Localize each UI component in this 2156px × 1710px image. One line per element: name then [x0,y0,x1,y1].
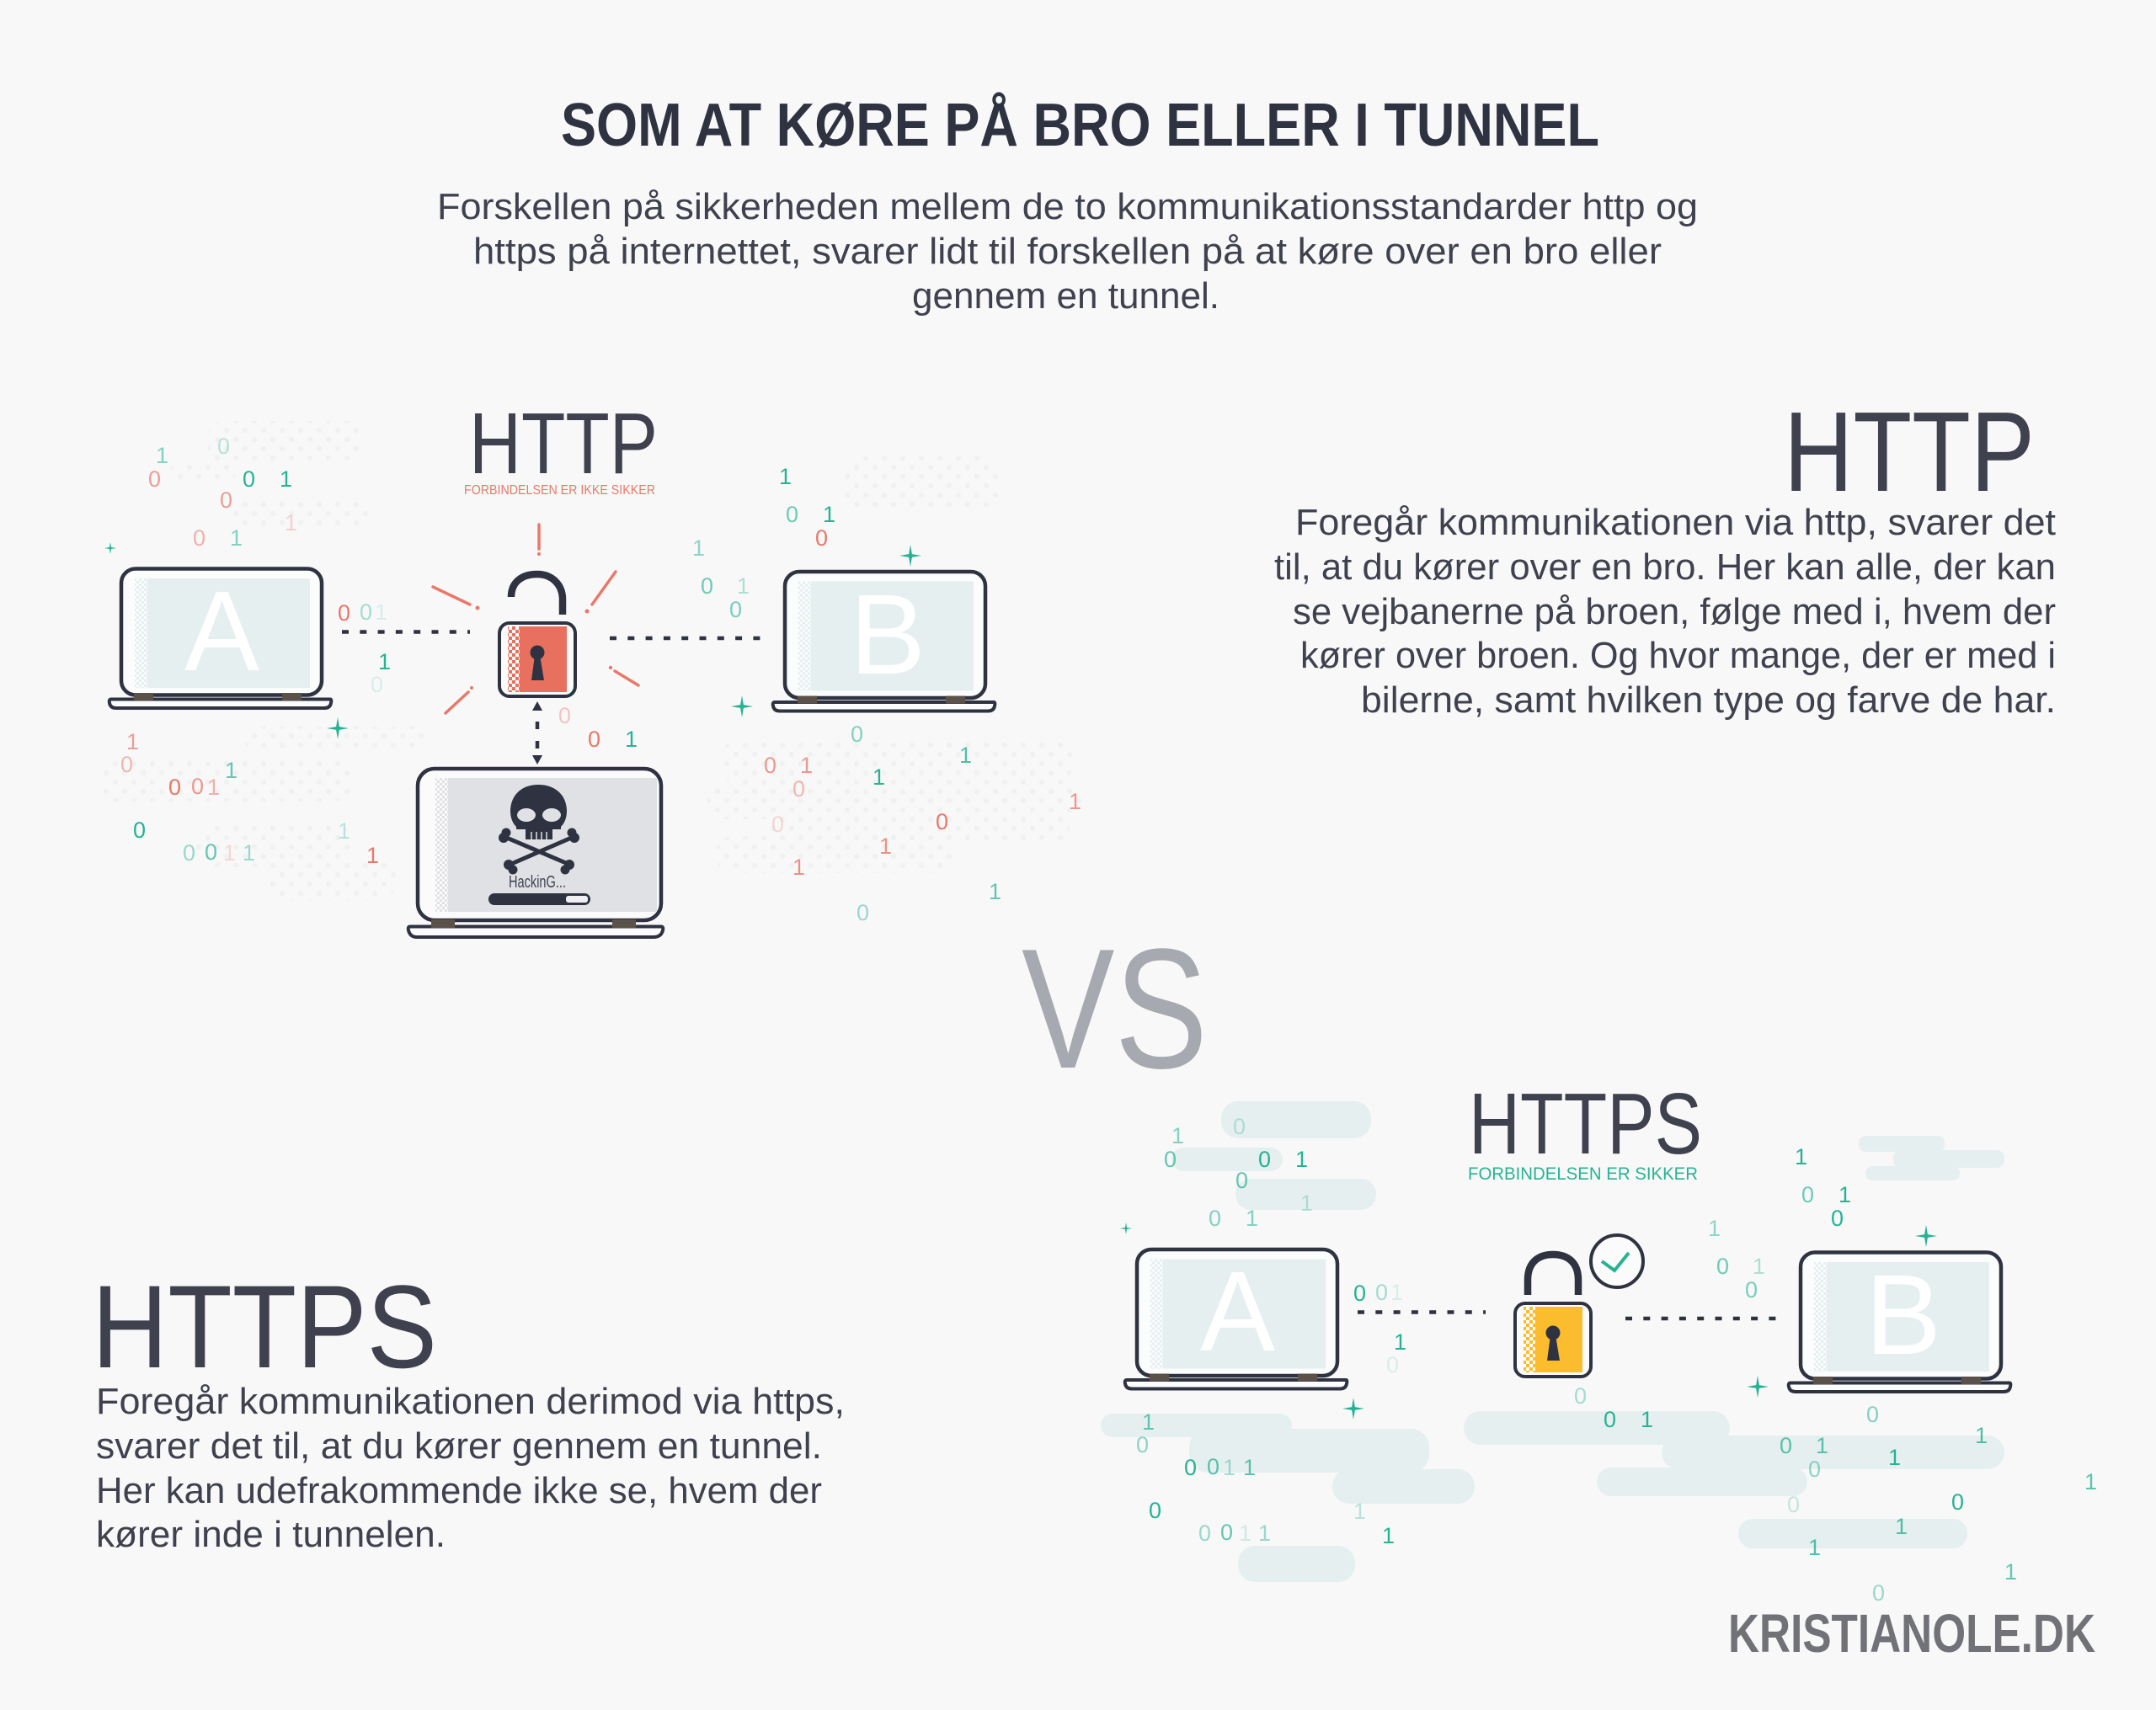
https binary digits: 0 [1808,1457,1821,1482]
laptop: hacker [408,769,663,937]
http binary digits: 1 [779,464,792,489]
http binary digits: 1 [378,649,391,674]
https binary digits: 1 [1382,1523,1395,1548]
http binary digits: 1 [800,753,813,778]
http binary digits: 0 [191,774,204,799]
https binary digits: 0 [1604,1407,1616,1432]
laptop B: B [1865,1251,1941,1378]
http binary digits: 0 [588,727,600,752]
https binary digits: 1 [1394,1329,1406,1355]
dotted connection lines [342,631,771,749]
text block: http explanation [1274,502,2056,721]
https binary digits: 0 [1386,1352,1399,1377]
https binary digits: 1 [1816,1433,1828,1458]
http background clouds [101,421,1084,901]
text block: https explanation: Her kan udefrakommende ikke se, hvem der [96,1470,822,1511]
https heading: HTTPS [1469,1075,1702,1172]
intro text: Forskellen på sikkerheden mellem de to kommunikationsstandarder http og [437,186,1698,227]
http binary digits: 1 [366,843,379,868]
http binary digits: 0 [193,525,205,551]
laptop A: A [184,567,259,695]
https binary digits: 1 [1246,1206,1258,1231]
http binary digits: 0 [220,487,232,513]
http binary digits: 0 [371,672,383,697]
icon: sparkles [104,542,921,739]
https binary digits: 0 [1574,1383,1587,1409]
laptop A [109,567,331,708]
http status label: FORBINDELSEN ER IKKE SIKKER [464,483,655,498]
https binary digits: 1 [2004,1559,2017,1585]
intro text [437,186,1698,317]
https binary digits: 0 [1787,1492,1800,1517]
https binary digits: 0 [1149,1498,1161,1523]
https binary digits: 1 [1975,1423,1988,1448]
http binary digits: 0 [857,900,869,925]
icon: open red lock [499,574,575,696]
http binary digits: 1 [959,743,972,768]
http binary digits: 1 [625,727,638,752]
http binary digits: 0 [936,809,948,834]
http binary digits: 0 [205,839,217,865]
https binary digits: 1 [1295,1147,1308,1172]
https binary digits: 0 [1184,1455,1197,1480]
http binary digits: 1 [1069,789,1081,814]
https binary digits: 0 [1951,1489,1964,1515]
http binary digits [120,434,1081,925]
http binary digits: 0 [792,776,805,802]
laptop B [773,571,995,711]
text block: http explanation: se vejbanerne på broen, følge med i, hvem der [1293,591,2056,632]
http binary digits: 1 [873,764,885,790]
http binary digits: 1 [126,729,139,754]
http binary digits: 1 [989,879,1001,904]
text block: https explanation [96,1381,845,1555]
http binary digits: 0 [338,600,350,626]
https status label: FORBINDELSEN ER SIKKER [1468,1164,1698,1184]
http binary digits: 1 [225,758,237,783]
http binary digits: 0 [183,840,195,866]
https binary digits: 1 [1708,1216,1721,1241]
intro text: https på internettet, svarer lidt til forskellen på at køre over en bro eller [473,231,1662,272]
https binary digits: 1 [1838,1182,1851,1207]
https binary digits: 1 [1239,1521,1251,1546]
dotted connection lines [1358,1312,1786,1318]
laptop A [1125,1248,1347,1389]
http binary digits: 1 [692,535,705,561]
https binary digits: 0 [1209,1206,1221,1231]
http binary digits: 1 [223,840,236,866]
http binary digits: 0 [133,818,146,843]
laptop A: A [1200,1248,1275,1375]
https binary digits: 0 [1235,1168,1248,1193]
text block: https explanation: Foregår kommunikationen derimod via https, [96,1381,845,1422]
http heading: HTTP [469,395,658,492]
http binary digits: 0 [771,812,784,837]
http binary digits: 0 [120,752,133,777]
https binary digits: 1 [1142,1409,1155,1435]
https binary digits: 1 [2084,1469,2097,1494]
https binary digits: 0 [1831,1206,1844,1231]
http binary digits: 0 [815,525,828,551]
http binary digits: 1 [879,834,892,859]
https binary digits: 1 [1895,1514,1908,1539]
http binary digits: 0 [764,753,776,778]
icon: check mark badge [1591,1235,1643,1287]
http binary digits: 1 [285,510,297,535]
http binary digits: 0 [148,466,161,492]
https binary digits: 0 [1164,1147,1177,1172]
arrow: lock to hacker [532,701,542,764]
laptop B [1789,1251,2010,1392]
https binary digits: 1 [1258,1521,1271,1546]
http binary digits: 1 [737,573,750,599]
https binary digits: 0 [1716,1254,1729,1279]
http binary digits: 1 [230,525,243,551]
http binary digits: 1 [207,775,220,800]
http binary digits: 0 [360,599,372,625]
hacking label: HackinG... [509,873,566,892]
https binary digits: 1 [1171,1123,1184,1148]
text block: http explanation: Foregår kommunikationen via http, svarer det [1295,502,2056,543]
text block: https explanation: kører inde i tunnelen. [96,1514,446,1555]
title: SOM AT KØRE PÅ BRO ELLER I TUNNEL [561,92,1599,159]
panel: http illustration [101,395,1084,937]
icon: closed yellow lock [1515,1255,1591,1377]
http binary digits: 0 [851,722,863,747]
http binary digits: 1 [792,855,805,880]
https binary digits: 1 [1808,1535,1821,1560]
https binary digits: 0 [1353,1281,1366,1306]
icon: skull and crossbones [499,785,579,874]
https binary digits: 0 [1258,1147,1271,1172]
https binary digits: 0 [1136,1432,1149,1457]
laptop B: B [850,571,926,698]
https binary digits: 0 [1801,1182,1814,1207]
http binary digits: 0 [786,502,798,527]
https binary digits: 1 [1390,1280,1403,1305]
http binary digits: 0 [729,597,742,622]
text block: https explanation: svarer det til, at du kører gennem en tunnel. [96,1425,822,1467]
http binary digits: 0 [558,703,571,728]
progress bar [488,893,590,905]
https binary digits: 0 [1207,1454,1219,1479]
http binary digits: 0 [243,466,255,492]
https binary digits: 1 [1795,1144,1807,1169]
text block: http heading: HTTP [1784,388,2035,515]
text block: http explanation: kører over broen. Og hvor mange, der er med i [1300,635,2056,676]
http binary digits: 1 [156,443,168,468]
https binary digits: 0 [1233,1114,1246,1139]
https binary digits: 1 [1753,1254,1765,1279]
https binary digits: 0 [1220,1520,1233,1545]
https binary digits: 0 [1866,1402,1879,1427]
https binary digits: 1 [1353,1499,1366,1524]
icon: sparkles [1120,1223,1937,1420]
http binary digits: 1 [338,818,350,844]
text block: http explanation: til, at du kører over en bro. Her kan alle, der kan [1274,546,2056,588]
http binary digits: 1 [280,466,292,492]
vs label: VS [1022,914,1208,1105]
panel: https illustration [1101,1075,2097,1606]
http binary digits: 1 [243,840,255,866]
http binary digits: 1 [823,502,835,527]
https binary digits: 1 [1888,1445,1901,1470]
text block: http explanation: bilerne, samt hvilken type og farve de har. [1361,679,2056,721]
intro text: gennem en tunnel. [912,275,1219,317]
http binary digits: 0 [701,573,713,599]
https binary digits: 0 [1375,1280,1388,1305]
https binary digits: 1 [1641,1407,1653,1432]
https binary digits: 0 [1745,1277,1758,1302]
https binary digits: 1 [1243,1455,1256,1480]
warning rays [433,525,638,713]
http binary digits: 0 [217,434,230,459]
http binary digits: 0 [168,775,181,800]
https binary digits: 1 [1223,1455,1235,1480]
http binary digits: 1 [375,599,387,625]
https binary digits [1136,1114,2097,1606]
https background clouds [1101,1101,2004,1582]
https binary digits: 0 [1872,1580,1885,1606]
https binary digits: 0 [1198,1521,1211,1546]
text block: https heading: HTTPS [92,1260,437,1393]
https binary digits: 0 [1780,1433,1792,1458]
https binary digits: 1 [1300,1191,1313,1216]
